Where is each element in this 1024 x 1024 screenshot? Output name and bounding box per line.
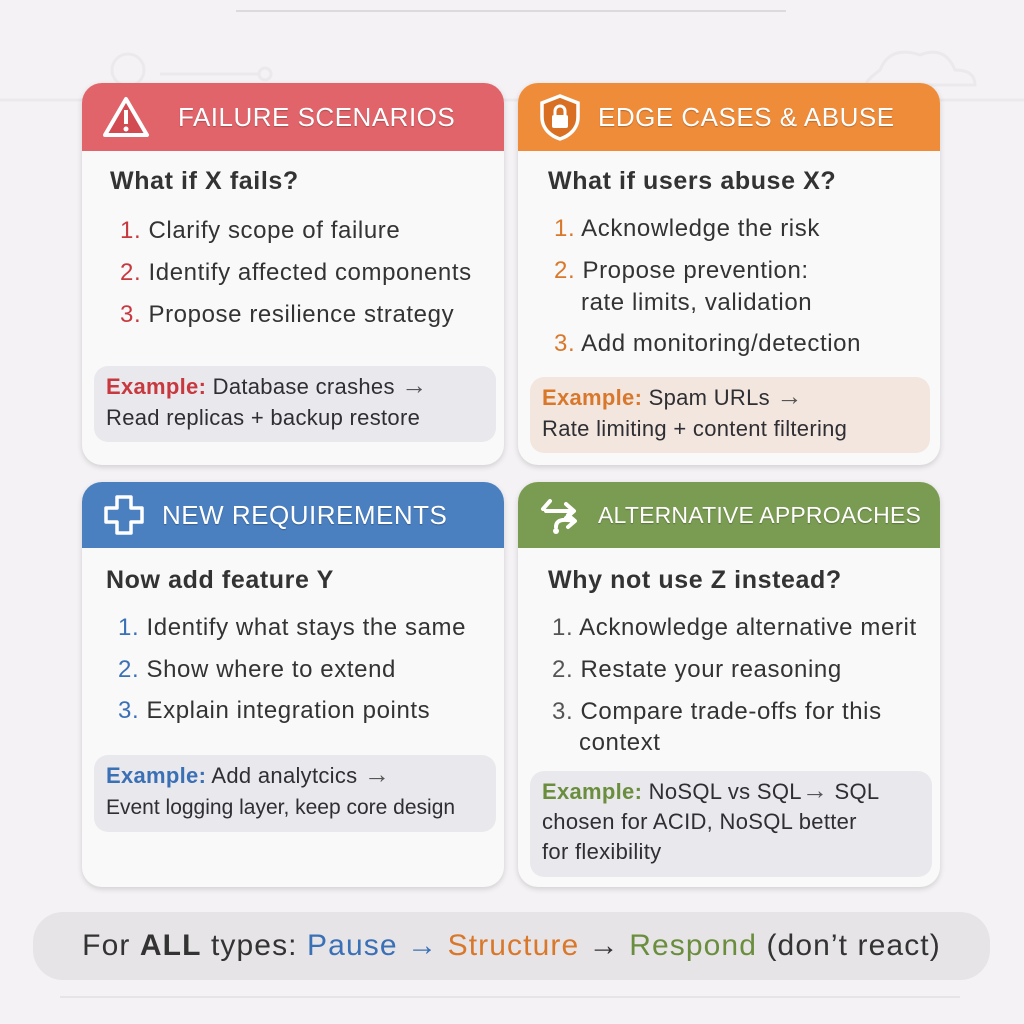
example <box>94 366 496 442</box>
panel: edge cases: rate limits, validation <box>581 289 812 316</box>
question: What if users abuse X? <box>548 167 836 195</box>
panel: edge cases: 2. Propose prevention: <box>554 257 809 284</box>
header: alternative approaches: ALTERNATIVE APPROACHES <box>598 502 921 528</box>
example: Example: Add analytcics → <box>106 759 390 789</box>
footer banner: ALL <box>140 929 202 962</box>
footer banner: Respond <box>629 929 757 962</box>
steps <box>120 217 472 328</box>
panel: new requirements: 3. Explain integration points <box>118 697 430 724</box>
question: Now add feature Y <box>106 566 334 594</box>
header: failure scenarios: FAILURE SCENARIOS <box>178 102 455 132</box>
header: edge cases <box>518 83 940 151</box>
panel: alternative approaches: 2. Restate your reasoning <box>552 656 842 683</box>
steps <box>118 614 466 724</box>
panel: alternative approaches <box>518 482 940 887</box>
panel: failure scenarios: 1. Clarify scope of failure <box>120 217 400 244</box>
footer banner: → <box>407 929 438 962</box>
example <box>530 771 932 877</box>
header: alternative approaches <box>518 482 940 548</box>
decorative bottom line <box>60 996 960 998</box>
example: Event logging layer, keep core design <box>106 796 455 819</box>
decorative top line <box>236 10 786 12</box>
example: Example: Spam URLs → <box>542 381 803 411</box>
footer banner: For types: → (don’t react) <box>82 929 941 962</box>
footer banner: Pause <box>307 929 398 962</box>
panel: alternative approaches: 3. Compare trade-offs for this <box>552 698 882 725</box>
panel: alternative approaches: context <box>579 729 661 756</box>
example <box>94 755 496 832</box>
panel: new requirements <box>82 482 504 887</box>
footer banner: Structure <box>448 929 579 962</box>
panel: new requirements: 2. Show where to extend <box>118 656 396 683</box>
panel: edge cases <box>518 83 940 465</box>
example: Read replicas + backup restore <box>106 405 420 430</box>
example: chosen for ACID, NoSQL better <box>542 809 857 834</box>
header: edge cases: EDGE CASES & ABUSE <box>598 102 895 132</box>
example: for flexibility <box>542 839 661 864</box>
panel: alternative approaches: 1. Acknowledge alternative merit <box>552 614 917 641</box>
question: What if X fails? <box>110 167 299 195</box>
example: Rate limiting + content filtering <box>542 416 847 441</box>
panel: new requirements: 1. Identify what stays the same <box>118 614 466 641</box>
steps <box>552 614 917 756</box>
header: new requirements: NEW REQUIREMENTS <box>162 500 447 530</box>
header: failure scenarios <box>82 83 504 151</box>
question: Why not use Z instead? <box>548 566 842 594</box>
panel: failure scenarios <box>82 83 504 465</box>
example: Example: NoSQL vs SQL→ SQL <box>542 775 879 805</box>
panel: edge cases: 3. Add monitoring/detection <box>554 330 861 357</box>
panel: edge cases: 1. Acknowledge the risk <box>554 215 820 242</box>
decorative background gear <box>0 51 1024 102</box>
header: new requirements <box>82 482 504 548</box>
footer banner <box>33 912 990 980</box>
panel: failure scenarios: 2. Identify affected components <box>120 259 472 286</box>
example: Example: Database crashes → <box>106 370 427 400</box>
steps <box>554 215 861 357</box>
panel: failure scenarios: 3. Propose resilience strategy <box>120 301 454 328</box>
example <box>530 377 930 453</box>
